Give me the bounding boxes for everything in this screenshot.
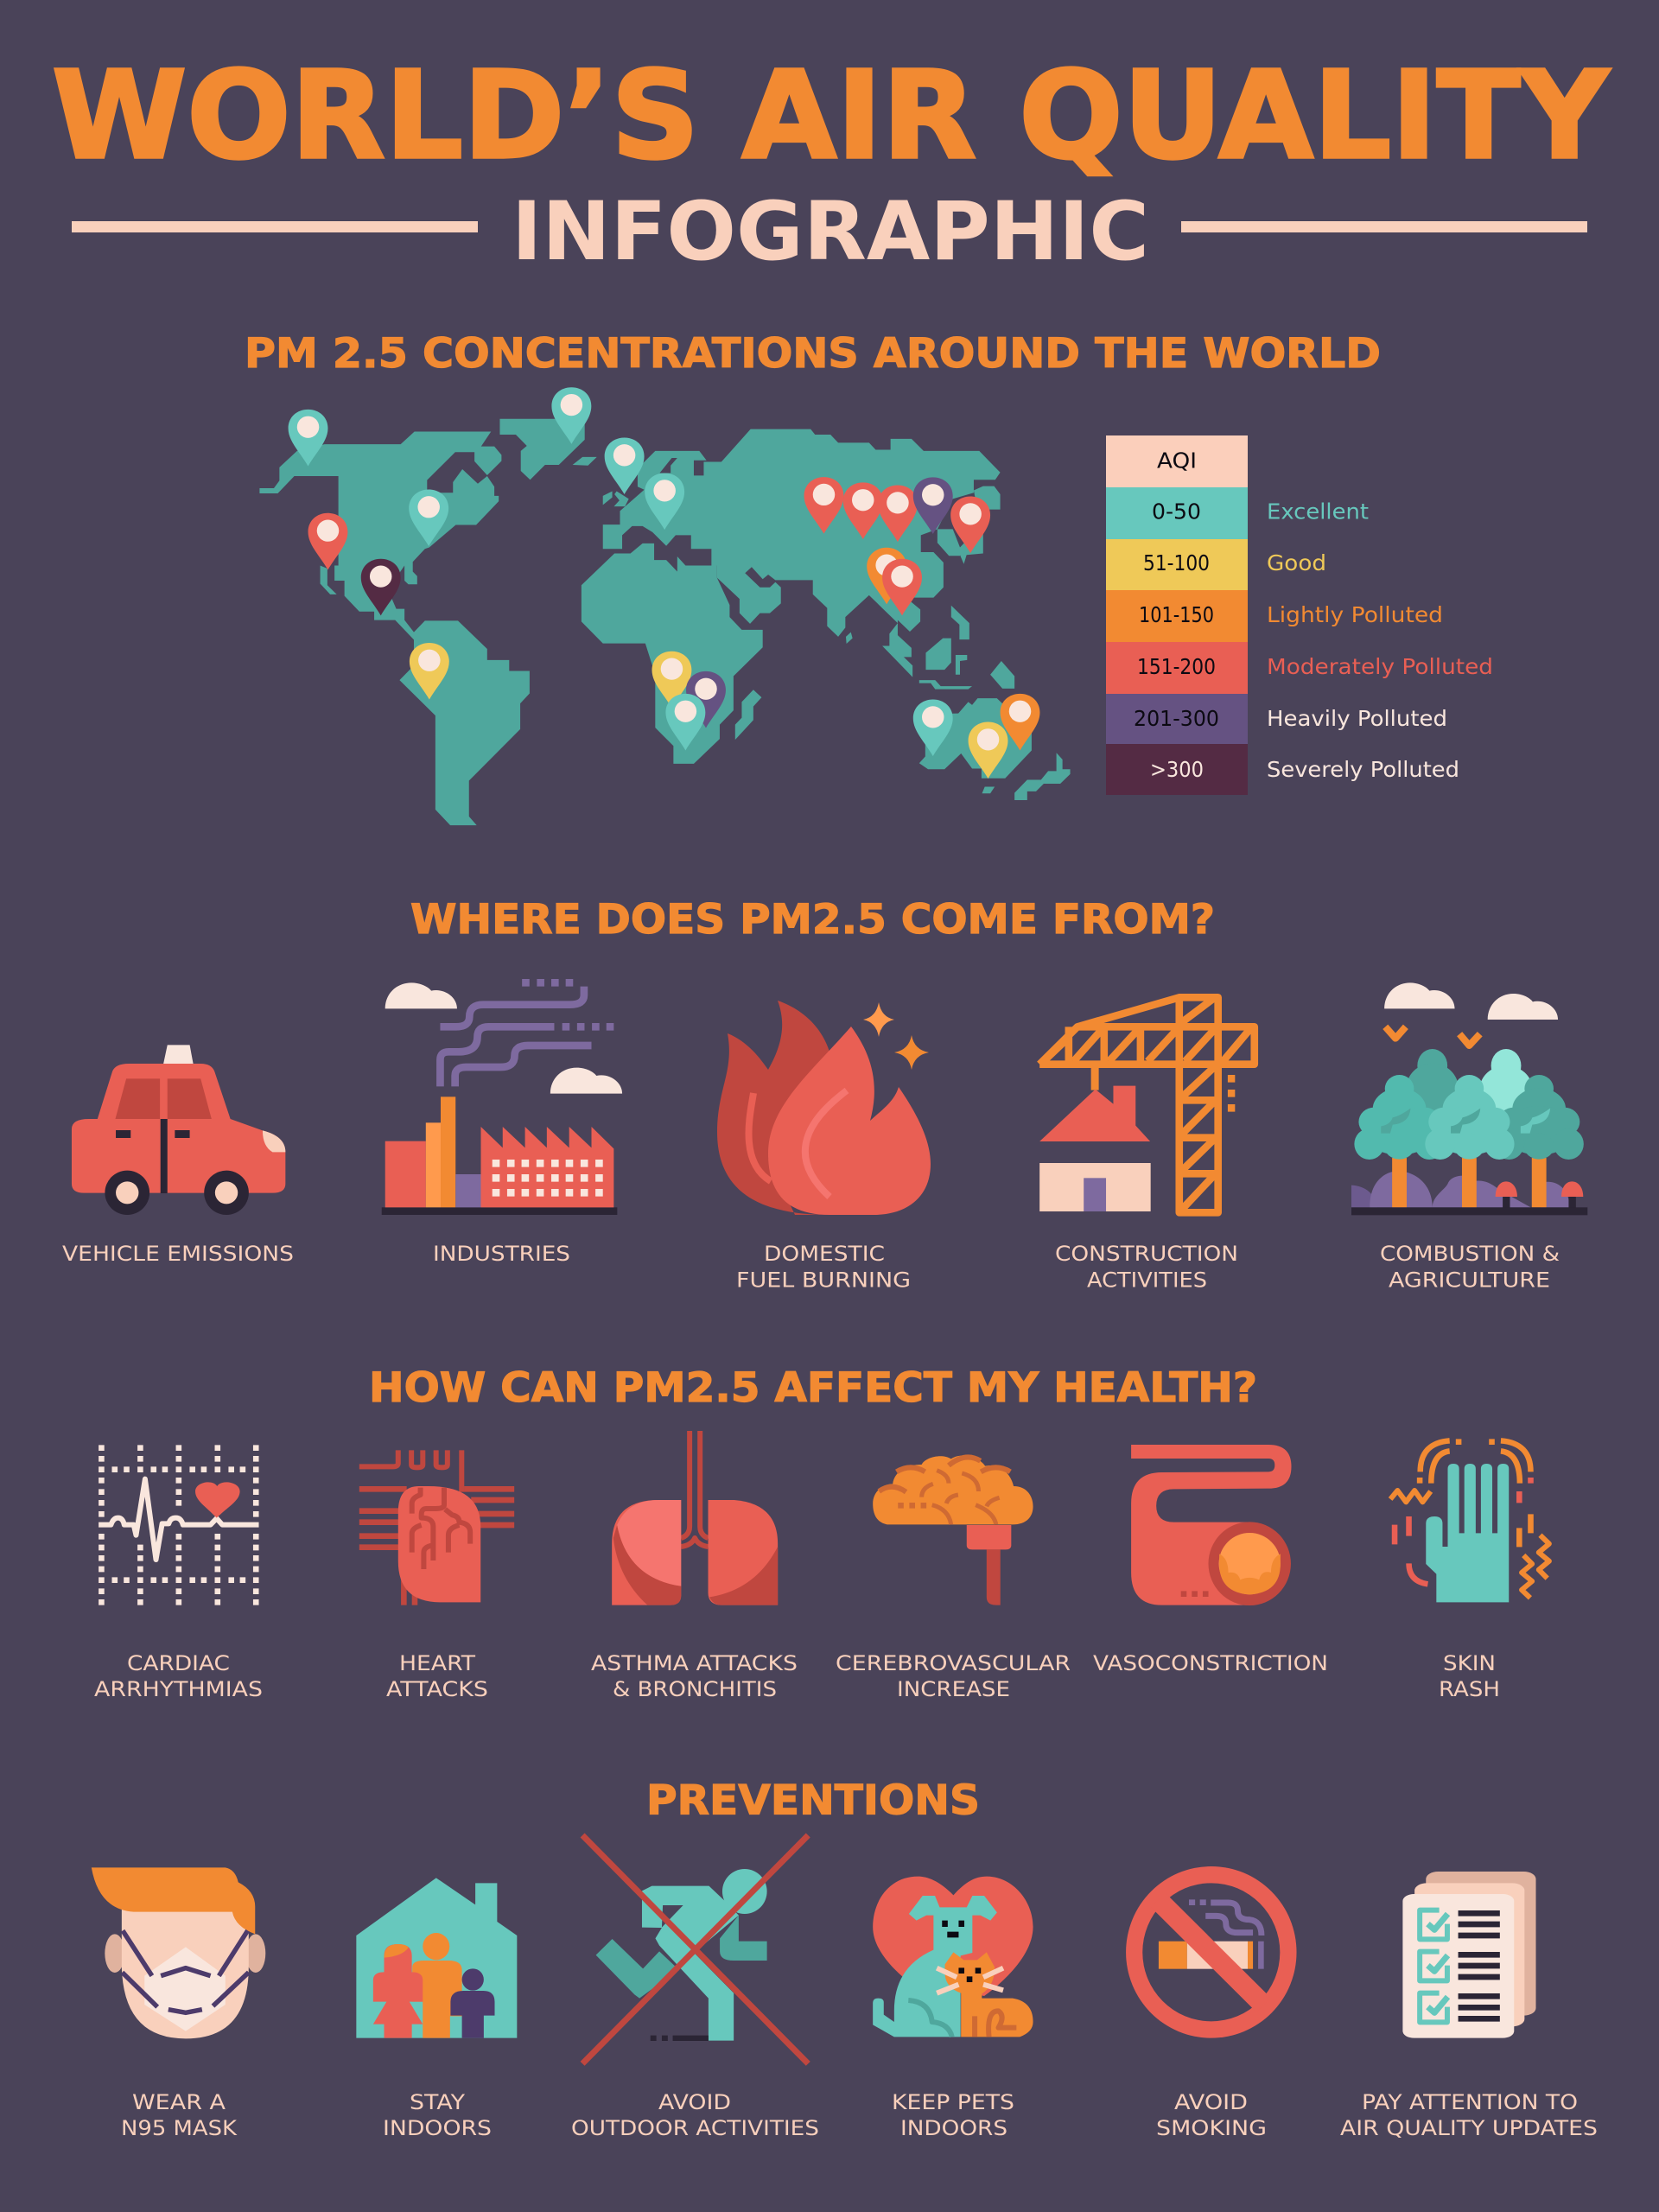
AQI row: excellent: Excellent bbox=[1267, 499, 1369, 524]
label: asthma attacks and bronchitis bbox=[591, 1651, 798, 1701]
pin: teal bbox=[605, 437, 645, 494]
pin: yellow bbox=[410, 643, 449, 700]
label: cardiac arrhythmias: ARRHYTHMIAS bbox=[94, 1677, 263, 1701]
label: avoid outdoor activities: AVOID bbox=[658, 2090, 731, 2114]
icon: pets with heart bbox=[873, 1877, 1033, 2037]
icon: man wearing mask bbox=[92, 1867, 265, 2038]
label: pay attention to air quality updates: PAY ATTENTION TO bbox=[1362, 2090, 1578, 2114]
pin: teal bbox=[913, 700, 953, 756]
icon: car bbox=[72, 1045, 285, 1215]
label: avoid outdoor activities bbox=[571, 2090, 819, 2140]
pin: red bbox=[882, 559, 922, 615]
AQI header cell: AQI bbox=[1157, 448, 1197, 474]
heading: PM 2.5 concentrations: PM 2.5 CONCENTRATIONS AROUND THE WORLD bbox=[245, 330, 1381, 378]
pin: red bbox=[950, 497, 990, 553]
label: avoid outdoor activities: OUTDOOR ACTIVITIES bbox=[571, 2116, 819, 2140]
AQI row: moderately polluted bbox=[1106, 642, 1493, 694]
AQI row: severely polluted: Severely Polluted bbox=[1267, 757, 1459, 782]
label: avoid smoking: AVOID bbox=[1174, 2090, 1248, 2114]
label: pay attention to air quality updates bbox=[1340, 2090, 1598, 2140]
AQI row: moderately polluted: Moderately Polluted bbox=[1267, 654, 1493, 679]
pin: red bbox=[878, 486, 918, 542]
label: construction activities: ACTIVITIES bbox=[1087, 1268, 1207, 1293]
label: construction activities bbox=[1055, 1242, 1238, 1293]
label: cerebrovascular increase: CEREBROVASCULAR bbox=[836, 1651, 1071, 1675]
label: avoid smoking bbox=[1156, 2090, 1267, 2140]
pin: orange bbox=[867, 548, 906, 604]
icon: checklist papers bbox=[1402, 1872, 1536, 2038]
pin: purple bbox=[913, 477, 953, 534]
label: combustion and agriculture: COMBUSTION & bbox=[1380, 1242, 1560, 1266]
label: construction activities: CONSTRUCTION bbox=[1055, 1242, 1238, 1266]
AQI row: lightly polluted: 101-150 bbox=[1139, 602, 1214, 627]
icon: crane and house bbox=[1039, 997, 1255, 1212]
AQI row: heavily polluted: 201-300 bbox=[1134, 706, 1219, 731]
label: domestic fuel burning: DOMESTIC bbox=[764, 1242, 885, 1266]
world map with location pins bbox=[259, 387, 1071, 825]
icon: family in house bbox=[356, 1878, 517, 2038]
pin: red bbox=[843, 482, 883, 539]
pin: teal bbox=[409, 489, 448, 546]
label: keep pets indoors: KEEP PETS bbox=[892, 2090, 1014, 2114]
label: pay attention to air quality updates: AIR QUALITY UPDATES bbox=[1340, 2116, 1598, 2140]
AQI row: heavily polluted: Heavily Polluted bbox=[1267, 706, 1447, 731]
label: cerebrovascular increase bbox=[836, 1651, 1071, 1701]
AQI row: good bbox=[1106, 539, 1326, 590]
AQI row: excellent: 0-50 bbox=[1152, 499, 1201, 524]
AQI row: excellent bbox=[1106, 487, 1369, 539]
icon: lungs bbox=[612, 1431, 778, 1605]
AQI header cell bbox=[1106, 435, 1248, 487]
heading: preventions: PREVENTIONS bbox=[646, 1777, 980, 1825]
icon: blood vessel bbox=[1131, 1445, 1291, 1605]
label: combustion and agriculture bbox=[1380, 1242, 1560, 1293]
AQI row: lightly polluted: Lightly Polluted bbox=[1267, 602, 1443, 627]
label: avoid smoking: SMOKING bbox=[1156, 2116, 1267, 2140]
pin: red bbox=[804, 477, 843, 534]
continents bbox=[259, 419, 1071, 825]
AQI row: moderately polluted: 151-200 bbox=[1137, 654, 1216, 679]
label: cerebrovascular increase: INCREASE bbox=[897, 1677, 1010, 1701]
pin: yellow bbox=[652, 652, 691, 708]
label: combustion and agriculture: AGRICULTURE bbox=[1389, 1268, 1550, 1293]
subtitle with rules bbox=[72, 185, 1587, 279]
label: industries: INDUSTRIES bbox=[433, 1242, 570, 1266]
pin: purple bbox=[686, 671, 726, 728]
icon: ECG with heart bbox=[99, 1445, 259, 1605]
label: keep pets indoors bbox=[892, 2090, 1014, 2140]
pin: teal bbox=[645, 474, 684, 530]
AQI row: good: 51-100 bbox=[1143, 550, 1210, 575]
AQI row: good: Good bbox=[1267, 550, 1326, 575]
icon: heart organ bbox=[359, 1450, 514, 1605]
heading: where does PM2.5 come from: WHERE DOES PM2.5 COME FROM? bbox=[410, 896, 1215, 944]
pin: yellow bbox=[969, 721, 1007, 779]
label: vasoconstriction: VASOCONSTRICTION bbox=[1093, 1651, 1328, 1675]
icon: factory bbox=[382, 979, 622, 1215]
label: skin rash: RASH bbox=[1439, 1677, 1500, 1701]
label: cardiac arrhythmias: CARDIAC bbox=[127, 1651, 230, 1675]
label: stay indoors: STAY bbox=[410, 2090, 465, 2114]
label: wear a N95 mask bbox=[121, 2090, 238, 2140]
label: domestic fuel burning bbox=[736, 1242, 911, 1293]
label: stay indoors: INDOORS bbox=[383, 2116, 492, 2140]
title: WORLD’S AIR QUALITY bbox=[52, 46, 1611, 187]
label: keep pets indoors: INDOORS bbox=[900, 2116, 1007, 2140]
label: stay indoors bbox=[383, 2090, 492, 2140]
icon: flames bbox=[717, 1001, 931, 1215]
icon: brain bbox=[873, 1456, 1033, 1605]
icon: trees bbox=[1351, 982, 1587, 1215]
AQI row: severely polluted bbox=[1106, 744, 1459, 795]
label: skin rash bbox=[1439, 1651, 1500, 1701]
label: asthma attacks and bronchitis: ASTHMA ATTACKS bbox=[591, 1651, 798, 1675]
label: wear a N95 mask: WEAR A bbox=[132, 2090, 226, 2114]
pin: orange bbox=[1001, 694, 1039, 750]
pin: teal bbox=[551, 387, 591, 444]
label: domestic fuel burning: FUEL BURNING bbox=[736, 1268, 911, 1293]
label: wear a N95 mask: N95 MASK bbox=[121, 2116, 238, 2140]
icon: crossed-out runner bbox=[582, 1835, 808, 2063]
pin: red bbox=[308, 513, 347, 569]
label: heart attacks bbox=[386, 1651, 488, 1701]
label: heart attacks: ATTACKS bbox=[386, 1677, 488, 1701]
pin: teal bbox=[665, 694, 705, 750]
label: vehicle emissions: VEHICLE EMISSIONS bbox=[62, 1242, 294, 1266]
label: heart attacks: HEART bbox=[399, 1651, 475, 1675]
icon: hand with rash bbox=[1390, 1439, 1549, 1602]
AQI row: heavily polluted bbox=[1106, 694, 1447, 744]
label: skin rash: SKIN bbox=[1443, 1651, 1496, 1675]
AQI legend table bbox=[1106, 435, 1493, 795]
label: cardiac arrhythmias bbox=[94, 1651, 263, 1701]
label: asthma attacks and bronchitis: & BRONCHITIS bbox=[613, 1677, 777, 1701]
pin: maroon bbox=[361, 559, 401, 615]
AQI row: lightly polluted bbox=[1106, 590, 1443, 642]
subtitle with rules: INFOGRAPHIC bbox=[512, 185, 1149, 279]
pin: teal bbox=[289, 410, 327, 466]
AQI row: severely polluted: >300 bbox=[1150, 757, 1204, 782]
icon: no smoking bbox=[1126, 1866, 1297, 2038]
heading: health effects: HOW CAN PM2.5 AFFECT MY HEALTH? bbox=[369, 1364, 1257, 1412]
